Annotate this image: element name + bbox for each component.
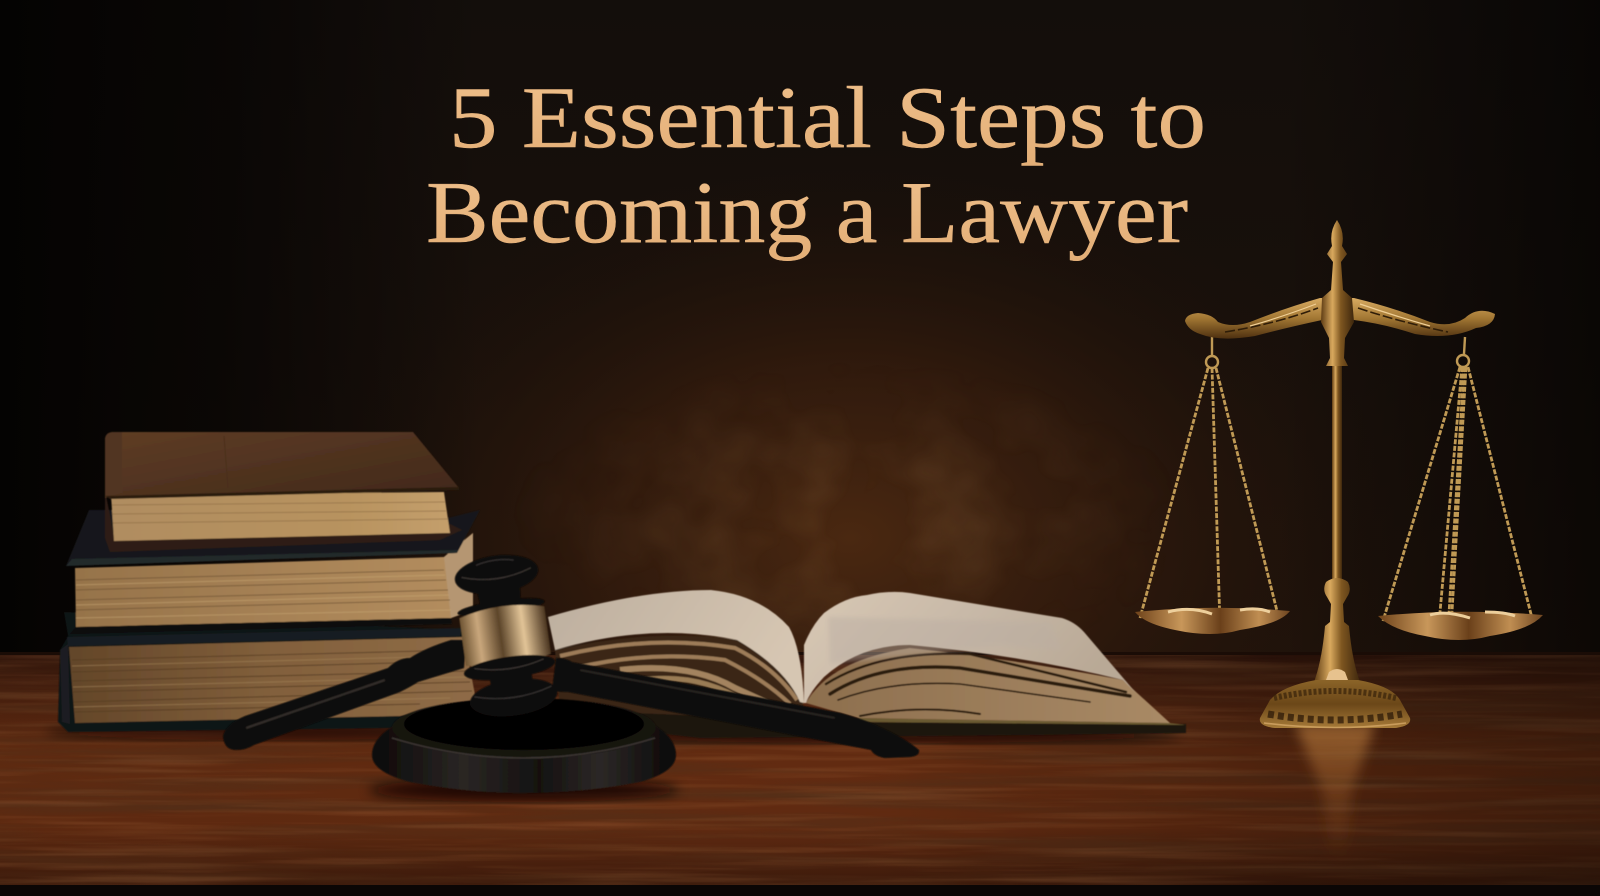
left pan [1135,608,1290,634]
book cover [540,700,1186,738]
title [426,70,1206,262]
lower stem [1314,578,1360,682]
bottom book [58,612,476,732]
left page [548,590,804,703]
scales of justice [1135,220,1543,860]
sound block [369,698,679,802]
right handle [552,658,919,758]
title: Becoming a Lawyer [426,165,1188,262]
right page block [806,648,1170,723]
dark wall background [118,0,1600,652]
title: 5 Essential Steps to [449,70,1206,167]
top book [105,432,462,552]
stack of books [45,432,495,740]
book shadow on table [45,724,495,740]
right chains [1383,367,1532,630]
wooden table [0,652,1600,896]
table reflection of scale [1295,724,1375,860]
hooks and rings [1206,337,1469,368]
gavel head [448,549,562,722]
open book [540,590,1186,743]
right page [804,592,1136,703]
gavel [223,549,919,802]
shadow under book [580,727,1180,743]
left handle [223,640,466,750]
right pan [1378,612,1543,640]
ornate beam [1185,298,1495,339]
left chains [1140,368,1277,625]
left page block [555,636,804,720]
column [1332,362,1342,580]
engraved base [1260,680,1410,728]
middle book [66,510,480,634]
finial and centre block [1321,220,1354,366]
